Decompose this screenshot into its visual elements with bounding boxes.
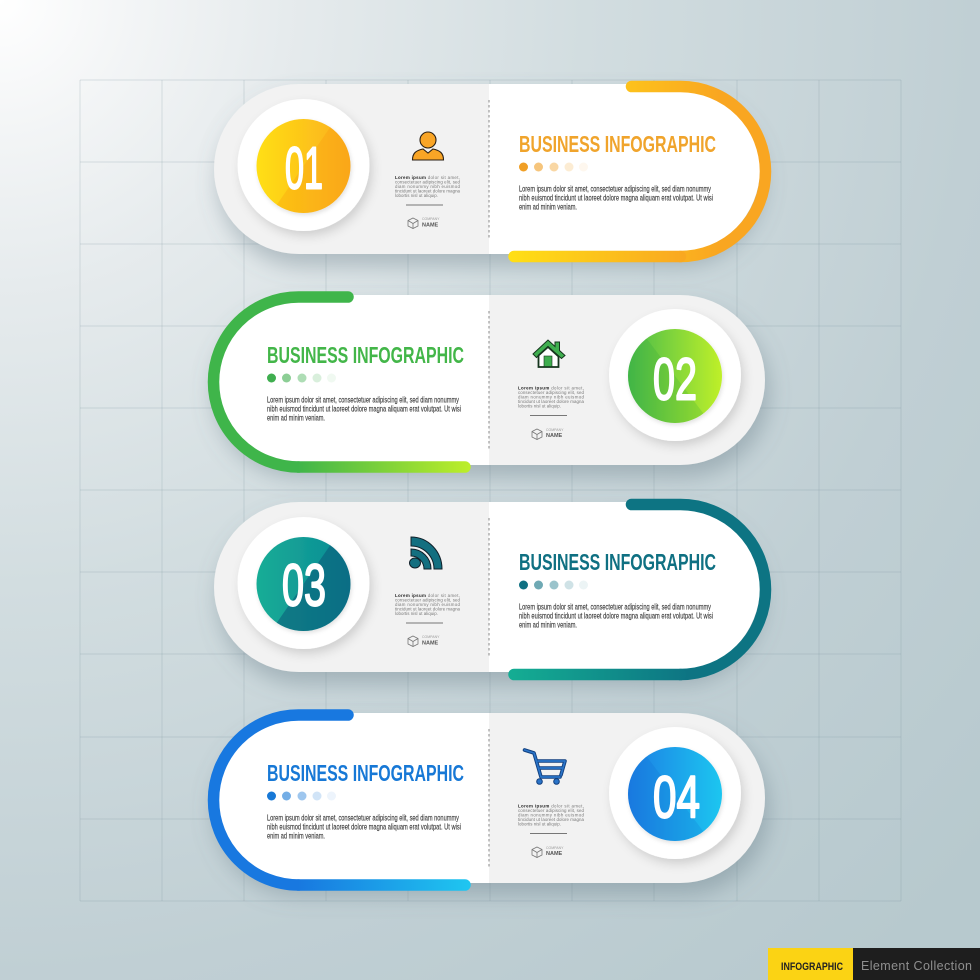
body text 02: enim ad minim veniam.: [267, 412, 325, 422]
small caption 03: Lorem ipsum dolor sit amet,: [395, 593, 460, 598]
body text 03: [519, 602, 713, 630]
body text 04: [267, 812, 461, 840]
footer badge: INFOGRAPHIC: [781, 961, 843, 973]
small caption 04: diam nonummy nibh euismod: [518, 812, 585, 818]
small caption 04: lobortis nisl ut aliquip.: [518, 822, 561, 826]
body text 01: nibh euismod tincidunt ut laoreet dolore magna aliquam erat volutpat. Ut wisi: [519, 192, 713, 202]
small caption 03: lobortis nisl ut aliquip.: [395, 611, 438, 616]
number badge 04: [609, 727, 741, 859]
heading 03: BUSINESS INFOGRAPHIC: [519, 549, 716, 575]
card base 03: [214, 502, 760, 672]
body text 02: Lorem ipsum dolor sit amet, consectetuer adipiscing elit, sed diam nonummy: [267, 394, 459, 404]
icon: person: [412, 132, 444, 160]
company logo 03: NAME: [422, 640, 439, 646]
card base 01: [214, 84, 760, 254]
body text 03: nibh euismod tincidunt ut laoreet dolore magna aliquam erat volutpat. Ut wisi: [519, 610, 713, 620]
number badge 02: 02: [653, 346, 697, 412]
small caption 02: tincidunt ut laoreet dolore magna: [518, 399, 585, 404]
body text 02: nibh euismod tincidunt ut laoreet dolore magna aliquam erat volutpat. Ut wisi: [267, 404, 461, 414]
outline accent 03: [514, 504, 766, 674]
company logo 03: COMPANY: [422, 635, 440, 639]
company logo 02: COMPANY: [546, 428, 564, 432]
dots 01: [519, 162, 588, 172]
small caption 01: lobortis nisl ut aliquip.: [395, 193, 438, 198]
small caption 01: [395, 175, 461, 198]
small caption 03: [395, 593, 461, 616]
small caption 02: consectetuer adipiscing elit, sed: [518, 390, 585, 395]
company logo 01: COMPANY: [422, 217, 440, 221]
outline accent 04: [214, 715, 465, 885]
company logo 02: NAME: [546, 433, 563, 439]
body text 03: enim ad minim veniam.: [519, 620, 577, 630]
card base 02: [209, 295, 765, 465]
icon: rss signal: [410, 537, 442, 569]
number badge 03: [238, 517, 370, 649]
small caption 02: lobortis nisl ut aliquip.: [518, 404, 561, 408]
panel: step 03: [214, 502, 766, 674]
panel: step 04: [209, 713, 765, 885]
small caption 02: [518, 386, 585, 408]
card base 04: [209, 713, 765, 883]
number badge 02: [609, 309, 741, 441]
icon: shopping cart: [524, 750, 565, 784]
outline accent 02: [214, 297, 465, 467]
icon: house: [533, 340, 565, 367]
company logo 04: NAME: [546, 851, 563, 857]
small caption 02: diam nonummy nibh euismod: [518, 394, 585, 400]
footer badge: [768, 948, 980, 980]
dots 04: [267, 792, 336, 800]
panel: step 01: [214, 84, 766, 256]
body text 02: [267, 394, 461, 422]
company logo 02: [532, 428, 564, 440]
body text 04: enim ad minim veniam.: [267, 830, 325, 840]
small caption 04: Lorem ipsum dolor sit amet,: [518, 804, 584, 808]
small caption 04: tincidunt ut laoreet dolore magna: [518, 817, 585, 822]
heading 04: BUSINESS INFOGRAPHIC: [267, 760, 464, 786]
small caption 03: consectetuer adipiscing elit, sed: [395, 598, 461, 602]
number badge 01: [238, 99, 370, 231]
company logo 01: [408, 217, 440, 228]
small caption 01: Lorem ipsum dolor sit amet,: [395, 175, 460, 180]
company logo 04: [532, 846, 564, 858]
company logo 03: [408, 635, 440, 646]
footer badge: Element Collection: [861, 959, 972, 973]
heading 01: BUSINESS INFOGRAPHIC: [519, 131, 716, 157]
small caption 01: consectetuer adipiscing elit, sed: [395, 180, 461, 184]
body text 01: enim ad minim veniam.: [519, 202, 577, 212]
body text 01: Lorem ipsum dolor sit amet, consectetuer adipiscing elit, sed diam nonummy: [519, 184, 711, 194]
small caption 02: Lorem ipsum dolor sit amet,: [518, 386, 584, 390]
company logo 01: NAME: [422, 222, 439, 228]
small caption 03: diam nonummy nibh euismod: [395, 602, 461, 607]
body text 03: Lorem ipsum dolor sit amet, consectetuer adipiscing elit, sed diam nonummy: [519, 602, 711, 612]
body text 04: Lorem ipsum dolor sit amet, consectetuer adipiscing elit, sed diam nonummy: [267, 812, 459, 822]
body text 01: [519, 184, 713, 212]
number badge 03: 03: [282, 552, 326, 618]
number badge 04: 04: [653, 764, 700, 830]
small caption 03: tincidunt ut laoreet dolore magna: [395, 606, 461, 612]
small caption 01: diam nonummy nibh euismod: [395, 184, 461, 189]
small caption 04: [518, 804, 585, 826]
small caption 01: tincidunt ut laoreet dolore magna: [395, 188, 461, 194]
body text 04: nibh euismod tincidunt ut laoreet dolore magna aliquam erat volutpat. Ut wisi: [267, 822, 461, 832]
panel: step 02: [209, 295, 765, 467]
dots 03: [519, 580, 588, 590]
heading 02: BUSINESS INFOGRAPHIC: [267, 342, 464, 368]
number badge 01: 01: [285, 136, 323, 202]
company logo 04: COMPANY: [546, 846, 564, 850]
outline accent 01: [514, 86, 766, 256]
dots 02: [267, 374, 336, 382]
small caption 04: consectetuer adipiscing elit, sed: [518, 808, 585, 813]
